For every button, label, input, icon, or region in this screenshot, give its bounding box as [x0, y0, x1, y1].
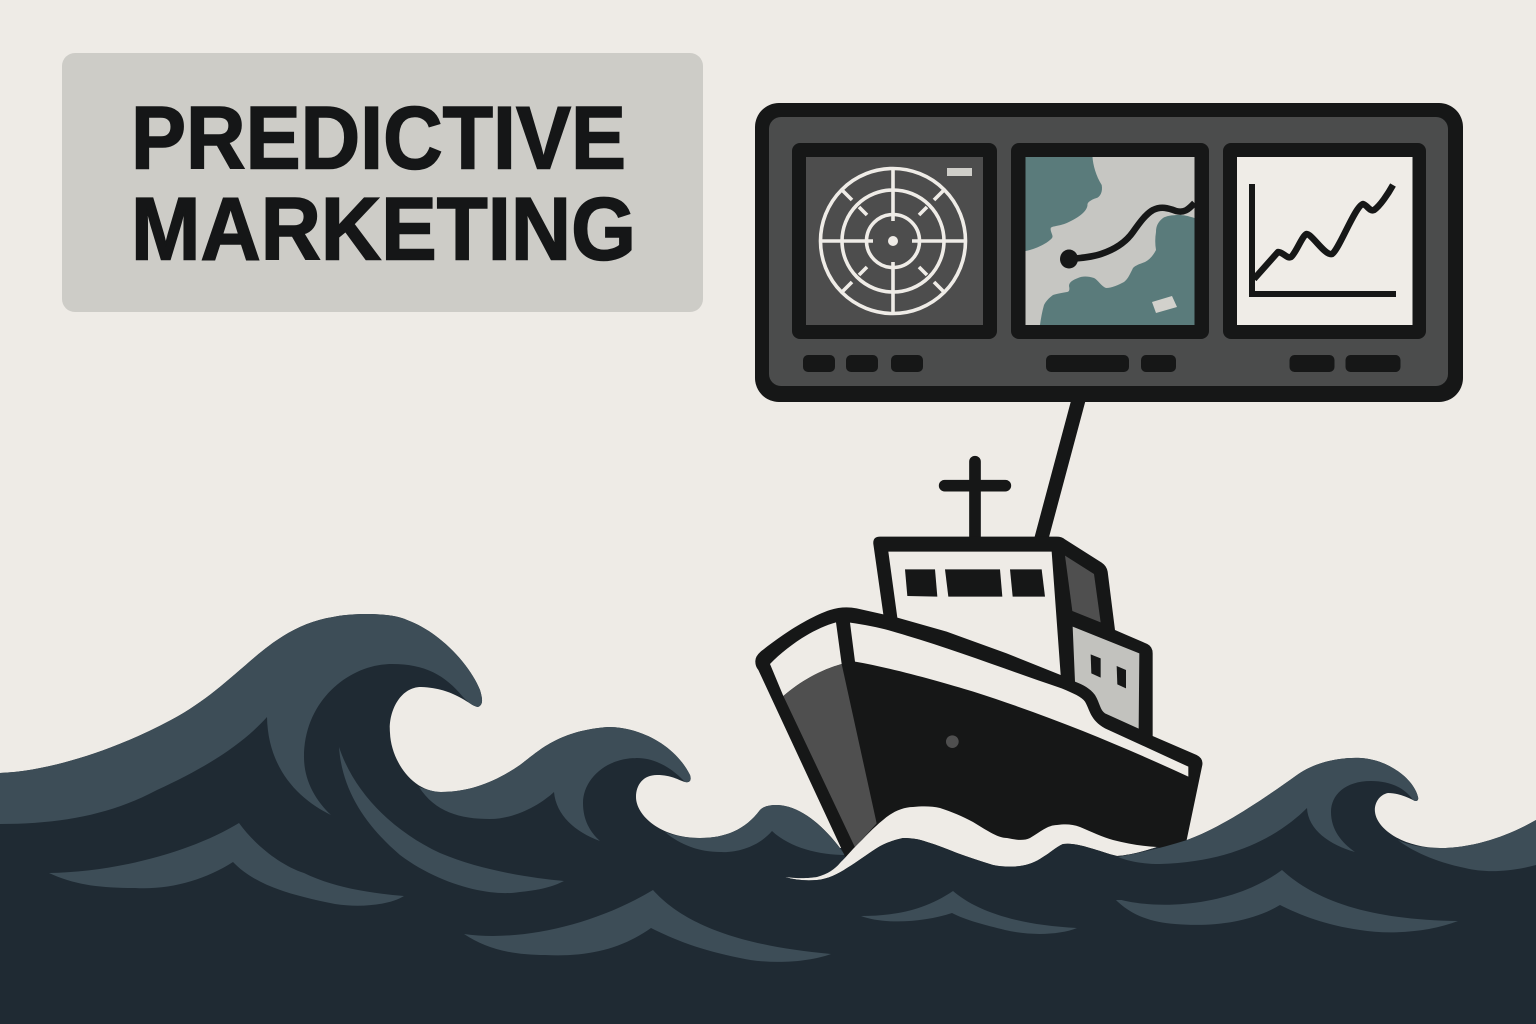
ship black outline and hull — [755, 537, 1202, 860]
aft cabin wall — [1073, 627, 1139, 729]
map route origin marker — [1060, 250, 1078, 268]
map land background — [1026, 157, 1194, 325]
wave swoosh lower right — [1114, 870, 1458, 932]
monitor console — [755, 103, 1463, 402]
title text: MARKETING — [131, 178, 636, 278]
wheelhouse windows — [905, 569, 1045, 597]
sea in front of ship hull — [785, 838, 1195, 900]
title panel — [62, 53, 703, 312]
radar indicator label — [947, 168, 972, 176]
chart axes — [1252, 184, 1396, 294]
radar screen — [792, 143, 997, 339]
console housing — [755, 103, 1463, 402]
map route line — [1069, 203, 1194, 259]
title card background — [62, 53, 703, 312]
wave swoosh bottom center — [464, 890, 831, 962]
sea behind ship — [0, 614, 1536, 1024]
radar rings and crosshair — [820, 168, 966, 314]
title text: PREDICTIVE — [131, 88, 626, 188]
white deck strip — [850, 623, 1188, 777]
radar center dot — [888, 236, 898, 246]
wheelhouse side panel — [1065, 556, 1101, 622]
chart background — [1237, 157, 1412, 325]
map bezel — [1011, 143, 1209, 339]
chart trend line — [1254, 185, 1393, 279]
second wave crest — [419, 727, 691, 841]
small wave behind bow — [665, 805, 845, 855]
big wave crest — [0, 614, 482, 824]
map screen — [1011, 143, 1209, 339]
bow wake foam — [785, 806, 1157, 880]
porthole — [946, 735, 959, 748]
wave swoosh below ship — [861, 891, 1077, 934]
map water lower right — [1040, 215, 1194, 325]
aft cabin windows — [1091, 654, 1126, 688]
title text — [131, 88, 636, 278]
line chart screen — [1223, 143, 1426, 339]
dark sea body — [0, 614, 1536, 1024]
wheelhouse front — [888, 552, 1061, 675]
aft cabin — [1073, 627, 1139, 729]
radar display — [806, 157, 983, 325]
right edge wave crest — [1398, 820, 1536, 871]
right wave crest in front of ship — [1118, 758, 1418, 864]
map water upper left — [1026, 157, 1102, 251]
ship — [755, 462, 1202, 860]
bow grey panel — [783, 664, 877, 847]
wave swoosh lower left — [49, 823, 404, 906]
map marker label — [1152, 296, 1177, 313]
chart bezel — [1223, 143, 1426, 339]
radar bezel — [792, 143, 997, 339]
bow white panel — [770, 622, 842, 696]
console faceplate — [769, 117, 1448, 386]
mast — [945, 462, 1005, 543]
console buttons — [803, 355, 1400, 372]
wave swoosh under curl — [339, 747, 564, 893]
antenna cable connecting ship to monitor — [1041, 398, 1079, 540]
